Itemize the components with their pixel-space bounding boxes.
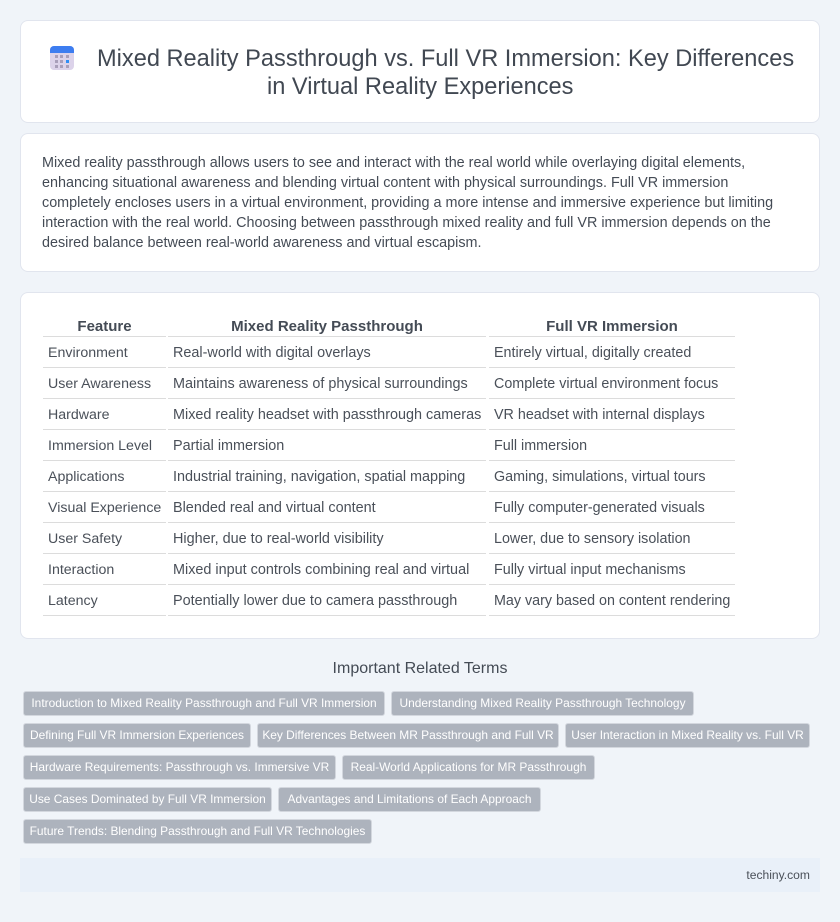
- title: in Virtual Reality Experiences: [267, 74, 573, 100]
- heading: important related terms: Important Related Terms: [333, 660, 507, 677]
- tag: [23, 787, 272, 812]
- table row: Immersion Level: Full immersion: [494, 438, 587, 454]
- table header: [43, 318, 735, 337]
- table header: Mixed Reality Passthrough: [231, 318, 423, 335]
- panel: introduction: [20, 133, 820, 272]
- tag: Introduction to Mixed Reality Passthrough and Full VR Immersion: [31, 696, 377, 710]
- table row: Applications: Applications: [48, 469, 125, 485]
- table row: Interaction: Mixed input controls combining real and virtual: [173, 562, 469, 578]
- table row: Visual Experience: [43, 500, 735, 523]
- table row: Immersion Level: Immersion Level: [48, 438, 152, 454]
- table row: Interaction: [43, 562, 735, 585]
- tag: [23, 691, 385, 716]
- table row: User Awareness: Maintains awareness of physical surroundings: [173, 376, 468, 392]
- panel: header: [20, 20, 820, 123]
- footer: [20, 858, 820, 892]
- tag: Defining Full VR Immersion Experiences: [30, 728, 244, 742]
- table header: Feature: [77, 318, 132, 335]
- title: [97, 46, 794, 100]
- table row: Applications: [43, 469, 735, 492]
- text block: introduction: interaction with the real world. Choosing between passthrough mixed reality and full VR immersion depends on the: [42, 215, 771, 231]
- table row: Immersion Level: [43, 438, 735, 461]
- table row: Environment: Environment: [48, 345, 128, 361]
- table row: Visual Experience: Blended real and virtual content: [173, 500, 376, 516]
- table header: Full VR Immersion: [546, 318, 678, 335]
- tag: [23, 819, 372, 844]
- tag: Hardware Requirements: Passthrough vs. Immersive VR: [30, 760, 329, 774]
- table row: Interaction: Fully virtual input mechanisms: [494, 562, 686, 578]
- table row: User Safety: User Safety: [48, 531, 122, 547]
- table row: Latency: Latency: [48, 593, 98, 609]
- table row: Applications: Gaming, simulations, virtual tours: [494, 469, 706, 485]
- text block: introduction: completely encloses users in a virtual environment, providing a more intense and immersive experience but limiting: [42, 195, 773, 211]
- table row: User Safety: Higher, due to real-world visibility: [173, 531, 384, 547]
- panel: comparison table: [20, 292, 820, 639]
- icon: calendar app: [50, 46, 74, 70]
- tag: [342, 755, 595, 780]
- table row: Environment: [43, 345, 735, 368]
- tag: Future Trends: Blending Passthrough and Full VR Technologies: [30, 824, 365, 838]
- tag: Advantages and Limitations of Each Approach: [288, 792, 531, 806]
- tag: [23, 755, 336, 780]
- table row: Visual Experience: Fully computer-generated visuals: [494, 500, 705, 516]
- panel: related term tags: [23, 691, 810, 844]
- table row: Environment: Real-world with digital overlays: [173, 345, 371, 361]
- table row: User Safety: [43, 531, 735, 554]
- text block: introduction: desired balance between real-world awareness and virtual escapism.: [42, 235, 481, 251]
- table row: Applications: Industrial training, navigation, spatial mapping: [173, 469, 465, 485]
- table row: User Awareness: Complete virtual environment focus: [494, 376, 718, 392]
- text block: introduction: enhancing situational awareness and blending virtual content with physical surroundings. Full VR immersion: [42, 175, 728, 191]
- table row: Hardware: VR headset with internal displays: [494, 407, 705, 423]
- tag: [565, 723, 810, 748]
- tag: Use Cases Dominated by Full VR Immersion: [29, 792, 266, 806]
- table row: Hardware: Mixed reality headset with passthrough cameras: [173, 407, 481, 423]
- footer source label: techiny.com: [746, 868, 810, 882]
- table row: User Awareness: User Awareness: [48, 376, 151, 392]
- tag: Real-World Applications for MR Passthrough: [351, 760, 586, 774]
- table row: Latency: Potentially lower due to camera passthrough: [173, 593, 457, 609]
- table row: Latency: May vary based on content rendering: [494, 593, 730, 609]
- title: Mixed Reality Passthrough vs. Full VR Immersion: Key Differences: [97, 46, 794, 72]
- table row: User Safety: Lower, due to sensory isolation: [494, 531, 691, 547]
- tag: [257, 723, 559, 748]
- tag: Understanding Mixed Reality Passthrough Technology: [399, 696, 686, 710]
- table row: Immersion Level: Partial immersion: [173, 438, 284, 454]
- tag: Key Differences Between MR Passthrough and Full VR: [262, 728, 554, 742]
- table row: Interaction: Interaction: [48, 562, 114, 578]
- tag: User Interaction in Mixed Reality vs. Full VR: [571, 728, 804, 742]
- text block: introduction: [42, 155, 773, 251]
- tag: [278, 787, 541, 812]
- table row: User Awareness: [43, 376, 735, 399]
- tag: [391, 691, 694, 716]
- table row: Hardware: [43, 407, 735, 430]
- text block: introduction: Mixed reality passthrough allows users to see and interact with the real world while overlaying digital elements,: [42, 155, 745, 171]
- table row: Hardware: Hardware: [48, 407, 110, 423]
- table row: Environment: Entirely virtual, digitally created: [494, 345, 691, 361]
- table row: Latency: [43, 593, 735, 616]
- table row: Visual Experience: Visual Experience: [48, 500, 161, 516]
- tag: [23, 723, 251, 748]
